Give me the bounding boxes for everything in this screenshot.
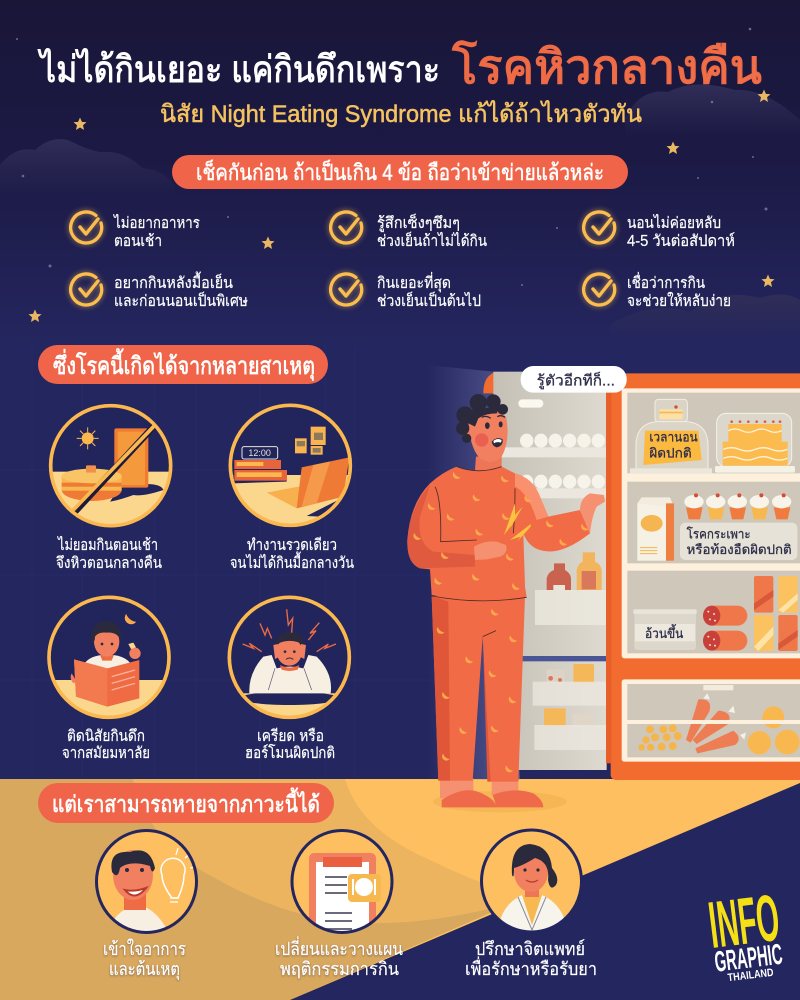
recovery caption 3 [465, 939, 597, 979]
icon: psychiatrist [482, 830, 582, 935]
icon: meal plan [292, 830, 392, 943]
checklist item 1: ตอนเช้า [114, 233, 162, 250]
label: weight gain [635, 624, 695, 641]
caption 1: ไม่ยอมกินตอนเช้า [56, 536, 158, 554]
icon: understand the symptoms [96, 830, 196, 935]
icon: reading late at night [47, 597, 173, 718]
icon: skipped breakfast [47, 406, 177, 528]
floor [0, 779, 800, 1000]
caption 4: ฮอร์โมนผิดปกติ [245, 744, 335, 762]
pill heading: recovery [38, 783, 334, 823]
label: irregular bedtime: เวลานอน [649, 430, 698, 445]
clouds [0, 84, 800, 340]
speech bubble [521, 366, 627, 393]
night sky background [0, 0, 800, 345]
caption 2: ทำงานรวดเดียว [247, 537, 337, 554]
checklist item 2: ช่วงเย็นถ้าไม่ได้กิน [377, 231, 487, 250]
shelf 3: sausages and cans [633, 576, 798, 651]
label: stomach problems: โรคกระเพาะ [687, 526, 751, 541]
checklist item 5 [331, 272, 481, 310]
caption 2: จนไม่ได้กินมื้อกลางวัน [230, 551, 354, 572]
label: stomach problems [680, 523, 797, 560]
stars [16, 28, 774, 322]
pill heading: checklist [172, 155, 628, 189]
logo: THAILAND [727, 967, 774, 984]
shelf 1: cakes [630, 399, 795, 473]
checklist [71, 212, 735, 310]
checklist item 2 [331, 212, 487, 250]
pill heading: recovery: แต่เราสามารถหายจากภาวะนี้ได้ [52, 788, 320, 817]
checklist item 2: รู้สึกเซ็งๆซึมๆ [377, 213, 460, 233]
checklist item 3: นอนไม่ค่อยหลับ [627, 214, 721, 232]
title: โรคหิวกลางคืน [452, 40, 762, 93]
checklist item 1 [71, 212, 200, 250]
recovery caption 1 [103, 938, 186, 980]
pill heading: checklist: เช็คกันก่อน ถ้าเป็นเกิน 4 ข้อ ถือว่าเข้าข่ายแล้วหล่ะ [196, 158, 604, 185]
shelf 2: milk and cupcakes [637, 493, 791, 561]
title [37, 40, 762, 93]
fridge door interior [483, 372, 614, 770]
title: ไม่ได้กินเยอะ แค่กินดึกเพราะ [37, 48, 440, 90]
checklist item 5: กินเยอะที่สุด [377, 272, 451, 293]
person [407, 394, 605, 812]
caption 4: เครียด หรือ [257, 727, 324, 745]
pill heading: causes: ซึ่งโรคนี้เกิดได้จากหลายสาเหตุ [53, 348, 315, 381]
checklist item 6: จะช่วยให้หลับง่าย [627, 292, 731, 310]
recovery caption 1: เข้าใจอาการ [103, 938, 186, 959]
refrigerator and person [407, 365, 800, 812]
checklist item 3 [584, 212, 735, 250]
cause captions [56, 536, 354, 762]
caption 1: จึงหิวตอนกลางคืน [56, 554, 162, 572]
speech bubble: รู้ตัวอีกทีก็... [537, 370, 615, 389]
checklist item 3: 4-5 วันต่อสัปดาห์ [627, 232, 735, 250]
fridge body [606, 373, 800, 780]
icon: working through lunch [227, 405, 357, 528]
checklist item 5: ช่วงเย็นเป็นต้นไป [377, 291, 481, 310]
pill heading: causes [38, 345, 328, 384]
subtitle: นิสัย Night Eating Syndrome แก้ได้ถ้าไหวตัวทัน [160, 100, 642, 128]
recovery caption 2: เปลี่ยนและวางแผน [275, 936, 403, 959]
recovery caption 1: และต้นเหตุ [109, 959, 180, 980]
checklist item 4: และก่อนนอนเป็นพิเศษ [114, 291, 248, 310]
checklist item 4: อยากกินหลังมื้อเย็น [114, 271, 233, 292]
drawer: vegetables and fruit [627, 693, 800, 754]
recovery caption 3: ปรึกษาจิตแพทย์ [475, 939, 585, 959]
recovery caption 3: เพื่อรักษาหรือรับยา [465, 956, 597, 979]
label: weight gain: อ้วนขึ้น [645, 624, 683, 641]
checklist item 6 [584, 272, 731, 310]
wall background [0, 340, 800, 785]
caption 4 [245, 727, 335, 762]
label: irregular bedtime: ผิดปกติ [649, 445, 692, 460]
icon: working through lunch: 12:00 [248, 448, 271, 458]
caption 3 [62, 728, 150, 762]
caption 1 [56, 536, 162, 572]
caption 2 [230, 537, 354, 572]
cause icons [47, 405, 357, 720]
checklist item 4 [71, 271, 248, 310]
recovery caption 2: พฤติกรรมการกิน [280, 959, 399, 979]
caption 3: จากสมัยมหาลัย [62, 745, 150, 762]
label: irregular bedtime [643, 430, 702, 465]
checklist item 1: ไม่อยากอาหาร [112, 214, 200, 232]
icon: stress and hormones [227, 597, 353, 720]
label: stomach problems: หรือท้องอืดผิดปกติ [687, 542, 792, 557]
logo [705, 880, 786, 986]
caption 3: ติดนิสัยกินดึก [67, 728, 145, 745]
recovery caption 2 [275, 936, 403, 979]
checklist item 6: เชื่อว่าการกิน [627, 272, 705, 292]
light beam from fridge [427, 365, 520, 779]
